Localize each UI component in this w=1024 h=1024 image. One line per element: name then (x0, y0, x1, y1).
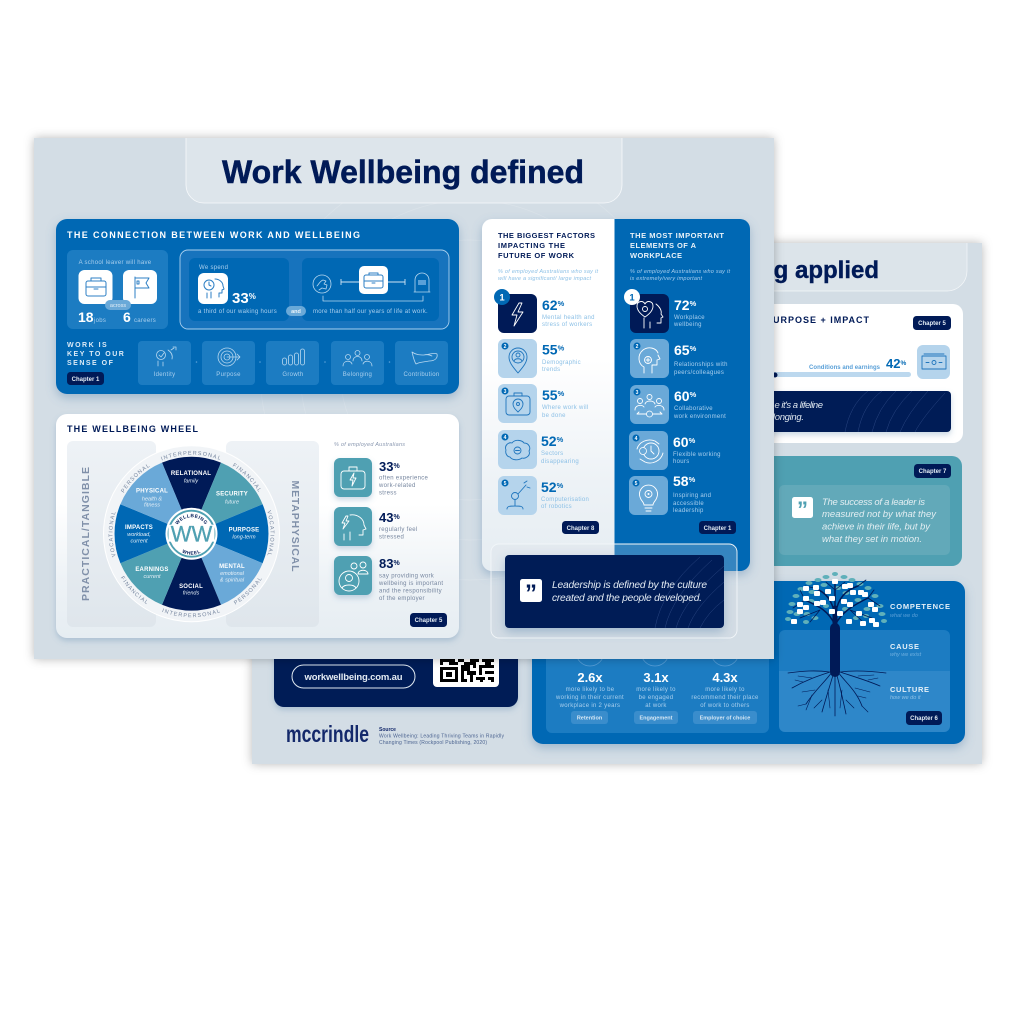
segment: social: friends (183, 590, 200, 596)
item 4: sectors disappearing: 4 (504, 435, 507, 441)
column: biggest factors (494, 231, 599, 534)
item 5: inspiring leadership (629, 473, 711, 515)
icon: quotation mark: ” (797, 497, 808, 522)
item 2: relationships (630, 339, 728, 378)
stat: 6 careers: 6 (123, 309, 131, 325)
panel: connection between work and wellbeing (56, 219, 459, 394)
stat: retention (555, 638, 624, 724)
stat: 33 percent: % (249, 292, 256, 301)
item 4: flexible hours: % (689, 436, 696, 445)
stat: engagement: be engaged (639, 695, 673, 701)
back page title: Work Wellbeing applied (609, 257, 879, 284)
stat: 6 careers (123, 309, 156, 325)
item 2: relationships: % (690, 344, 697, 353)
chart: wheel (103, 446, 280, 622)
item 1: workplace wellbeing: 72 (674, 297, 690, 313)
item 4: sectors disappearing: Sectors (541, 451, 563, 457)
card: time at work (180, 250, 449, 329)
card: we spend: a third of our waking hours (198, 309, 277, 315)
segment: security: SECURITY (216, 492, 248, 498)
segment: earnings (135, 567, 169, 580)
heading: THE BIGGEST FACTORS (498, 231, 595, 240)
heading (630, 231, 724, 260)
stat: retention: 2.6x (577, 670, 603, 685)
segment: relational (171, 471, 211, 484)
item 3: where work will be done: % (558, 389, 565, 398)
icon: flag (123, 270, 157, 304)
heading (498, 231, 595, 260)
chapter 8 tag (562, 521, 599, 534)
segment: social: SOCIAL (179, 584, 203, 590)
item 5: inspiring leadership: 5 (635, 481, 638, 487)
segment: mental: & spiritual (220, 578, 245, 584)
ring labels: PERSONAL (120, 464, 150, 493)
website button: workwellbeing.com.au (304, 672, 403, 683)
stat: engagement: 3.1x (643, 670, 669, 685)
item 3: collaborative environment: % (690, 390, 697, 399)
ring labels: FINANCIAL (120, 576, 147, 604)
icon: head with clock (198, 273, 228, 304)
stat: 33 percent: 33 (232, 290, 249, 307)
source note: Changing Times (Rockpool Publishing, 2020) (379, 740, 487, 746)
item 2: demographic trends: % (558, 344, 565, 352)
stat: 33 percent stress: stress (379, 490, 397, 496)
chapter 1 tag: Chapter 1 (72, 377, 100, 383)
item 4: flexible hours: Flexible working (673, 452, 721, 458)
heading: FUTURE OF WORK (498, 251, 575, 260)
chapter 6 tag: Chapter 6 (910, 716, 938, 722)
item 5: computerisation: of robotics (541, 504, 572, 510)
segment: earnings: EARNINGS (135, 567, 169, 573)
stat: conditions and earnings: Conditions and earnings (809, 365, 881, 371)
stat: 18 jobs: jobs (93, 318, 106, 324)
chapter 1 tag: Chapter 1 (704, 526, 732, 532)
back page title (520, 243, 967, 291)
segment: physical (136, 488, 168, 508)
item 3: collaborative environment: Collaborative (674, 406, 713, 412)
tile: growth (266, 341, 319, 385)
card: half our years (302, 258, 439, 321)
item 3: where work will be done (498, 384, 589, 423)
stat: employer of choice: Employer of choice (700, 716, 750, 722)
website button (292, 665, 415, 688)
stat: 6 careers: careers (134, 318, 156, 324)
stat: employer of choice: recommend their place (691, 695, 759, 701)
item 1: mental health: 62 (542, 297, 558, 313)
quote: lifeline: e it's a lifeline (774, 400, 823, 411)
quote text: The success of a leader is (822, 497, 925, 508)
item 2: demographic trends: 2 (504, 344, 507, 350)
item 2: demographic trends: Demographic (542, 360, 581, 366)
card: half our years: more than half our years of life at work. (313, 309, 428, 315)
item 2: demographic trends: trends (542, 367, 560, 373)
stats box (546, 600, 769, 733)
stat: 33 percent stress: 33 (379, 459, 393, 474)
segment: impacts: workload, (127, 532, 151, 538)
stat: 83 percent responsibility: wellbeing is important (378, 581, 443, 587)
ring labels (108, 450, 274, 618)
chapter 7 tag (914, 464, 951, 478)
panel: blue impact and tree (532, 572, 965, 744)
stat: 33 percent stress (334, 458, 429, 497)
quote text: what they set in motion. (822, 534, 922, 545)
item 3: collaborative environment: 60 (674, 388, 690, 404)
segment: mental: emotional (220, 571, 245, 577)
chapter 1 tag (67, 372, 104, 385)
item 2: relationships: 65 (674, 342, 690, 358)
heading: work is key: SENSE OF (67, 360, 114, 367)
card: we spend (189, 258, 289, 321)
item 4: flexible hours (629, 431, 721, 470)
segment: security (216, 492, 248, 506)
pill: and (286, 306, 306, 316)
item 5: inspiring leadership: % (689, 475, 696, 484)
label: culture: CULTURE (890, 685, 929, 694)
quote text: Leadership is defined by the culture (552, 580, 707, 591)
label: cause: why we exist (890, 652, 922, 658)
wheel centre logo: WELLBEING (174, 514, 208, 524)
stat: 43 percent stressed: % (393, 514, 400, 521)
tile: contribution (395, 341, 448, 385)
subheading: will have a significant/ large impact (498, 276, 591, 282)
quote text: created and the people developed. (552, 593, 702, 604)
segment: impacts: current (130, 538, 148, 544)
icon: quotation mark (520, 579, 542, 607)
item 5: computerisation: 52 (541, 479, 557, 495)
label: competence: what we do (890, 613, 918, 619)
item 1: workplace wellbeing: 1 (629, 292, 635, 304)
stat: 83 percent responsibility: say providing work (379, 574, 435, 580)
item 1: mental health: stress of workers (542, 322, 592, 328)
stat: conditions and earnings: % (900, 360, 906, 367)
ring labels: INTERPERSONAL (160, 450, 220, 460)
item 3: where work will be done: Where work will (542, 405, 589, 411)
logo: mccrindle: mccrindle (286, 721, 369, 747)
label: culture (890, 685, 929, 701)
ring labels: INTERPERSONAL (162, 608, 220, 618)
segment: mental (219, 564, 245, 584)
subheading (498, 269, 598, 282)
ring labels: FINANCIAL (232, 463, 261, 492)
tree bands (779, 630, 950, 732)
heading: WORKPLACE (630, 251, 682, 260)
wheel centre logo (166, 508, 218, 560)
stat: employer of choice: more likely to (705, 687, 745, 693)
stat: 83 percent responsibility: of the employer (379, 596, 425, 602)
label: culture: how we do it (890, 695, 921, 701)
item 3: collaborative environment (630, 385, 726, 424)
stat: retention: workplace in 2 years (559, 703, 620, 709)
tile: purpose (202, 341, 255, 385)
stat: 18 jobs (78, 309, 106, 325)
stat: 83 percent responsibility: and the responsibility (379, 588, 442, 594)
stat: employer of choice (691, 638, 759, 724)
item 5: computerisation: Computerisation (541, 497, 589, 503)
stat: 33 percent stress: often experience (379, 476, 429, 482)
stat: engagement: more likely to (636, 687, 676, 693)
chapter 8 tag: Chapter 8 (567, 526, 595, 532)
item 2: demographic trends: 55 (542, 342, 558, 358)
tree foliage (785, 572, 887, 624)
subheading: is extremely/very important (630, 276, 702, 282)
ring labels: VOCATIONAL (268, 510, 274, 556)
item 4: flexible hours: hours (673, 459, 690, 465)
segment: physical: PHYSICAL (136, 488, 168, 494)
illustration: tree (785, 572, 887, 716)
item 1: mental health (494, 289, 595, 333)
heading: THE MOST IMPORTANT (630, 231, 724, 240)
item 5: computerisation: % (557, 481, 564, 490)
quote text: measured not by what they (822, 509, 937, 520)
stat: retention: more likely to be (566, 687, 615, 693)
quote text (822, 497, 937, 545)
stat: employer of choice: of work to others (700, 703, 750, 709)
segment: social (179, 584, 203, 596)
stat: 43 percent stressed: stressed (379, 534, 404, 540)
stat: 83 percent responsibility (334, 556, 443, 602)
side box: practical/tangible: PRACTICAL/TANGIBLE (80, 467, 92, 601)
quote box (779, 485, 950, 555)
stat: 43 percent stressed: regularly feel (379, 527, 418, 533)
heading: ELEMENTS OF A (630, 241, 697, 250)
pill: and: and (291, 309, 301, 315)
wheel centre logo: WW (171, 522, 212, 547)
heading: work is key (67, 342, 125, 367)
segment: relational: family (184, 478, 199, 484)
side box: practical/tangible (67, 441, 156, 627)
item 1: workplace wellbeing (624, 289, 705, 333)
item 5: inspiring leadership: accessible (673, 501, 704, 507)
item 2: relationships: peers/colleagues (674, 370, 724, 376)
item 5: inspiring leadership: leadership (673, 508, 704, 514)
side box: metaphysical (226, 441, 319, 627)
icon: quotation mark: ” (525, 580, 537, 607)
stat: retention: Retention (577, 716, 603, 722)
subheading: % of employed Australians who say it (630, 269, 730, 275)
tree blossoms (791, 579, 879, 627)
ring labels: VOCATIONAL (108, 512, 116, 558)
subheading: % of employed Australians who say it (498, 269, 598, 275)
segment: physical: health & (142, 496, 162, 502)
caption: employed australians: % of employed Australians (334, 442, 405, 448)
item 1: workplace wellbeing: % (690, 299, 697, 308)
quote: leadership (491, 544, 737, 638)
chapter 5 tag: Chapter 5 (415, 618, 443, 624)
card: school leaver: A school leaver will have (79, 260, 152, 266)
segment: purpose (229, 528, 259, 540)
stat: engagement: Engagement (639, 716, 673, 722)
tile: identity: Identity (154, 372, 175, 378)
stat: 83 percent responsibility: % (393, 560, 400, 567)
heading: purpose and impact: PURPOSE + IMPACT (766, 315, 871, 325)
icon: banknote (917, 345, 950, 379)
chapter 5 tag: Chapter 5 (918, 321, 946, 327)
tile: purpose: Purpose (216, 372, 241, 378)
stat: 18 jobs: 18 (78, 309, 94, 325)
panel: purpose and impact (532, 304, 963, 443)
item 4: sectors disappearing: 52 (541, 433, 557, 449)
stat: engagement: at work (645, 703, 667, 709)
tree roots (788, 671, 886, 716)
stat: conditions and earnings: 42 (886, 356, 900, 371)
stat: retention: working in their current (555, 695, 624, 701)
source note: Source (379, 727, 396, 733)
ring labels: PERSONAL (234, 578, 262, 604)
QR code (433, 640, 499, 687)
quote text: achieve in their life, but by (822, 522, 931, 532)
chapter 7 tag: Chapter 7 (919, 469, 947, 475)
back page: Work Wellbeing applied (252, 243, 982, 764)
item 3: where work will be done: 55 (542, 387, 558, 403)
panel: teal leadership quote (540, 456, 962, 566)
segment: earnings: current (143, 574, 161, 580)
title box (186, 138, 622, 203)
heading: IMPACTING THE (498, 241, 565, 250)
segment: relational: RELATIONAL (171, 471, 211, 477)
item 4: sectors disappearing: disappearing (541, 459, 579, 465)
chapter 5 tag (410, 613, 447, 627)
stat: 83 percent responsibility: 83 (379, 556, 393, 571)
segment: mental: MENTAL (219, 564, 245, 570)
card: we spend: We spend (199, 265, 228, 271)
heading: THE WELLBEING WHEEL (67, 424, 200, 434)
source note: Work Wellbeing: Leading Thriving Teams in Rapidly (379, 734, 504, 740)
segment: impacts: IMPACTS (125, 525, 153, 531)
panel: website and QR (274, 640, 518, 707)
stat: 33 percent stress: % (393, 463, 400, 470)
icon: briefcase (78, 270, 112, 304)
tile: contribution: Contribution (404, 372, 439, 378)
panel: biggest factors and important elements (482, 219, 750, 571)
item 4: flexible hours: 60 (673, 434, 689, 450)
item 3: collaborative environment: 3 (636, 390, 639, 396)
segment: physical: fitness (144, 502, 160, 508)
tile: identity (138, 341, 191, 385)
chapter 5 tag (913, 316, 951, 330)
chapter 6 tag (906, 711, 942, 725)
tile: belonging (331, 341, 384, 385)
item 2: demographic trends (498, 339, 581, 378)
item 5: computerisation: 5 (504, 481, 507, 487)
label: cause (890, 642, 922, 658)
title: Work Wellbeing defined (222, 154, 584, 190)
stat: conditions and earnings (700, 356, 911, 378)
stat: 43 percent stressed (334, 507, 418, 546)
item 3: collaborative environment: work environment (673, 414, 726, 420)
panel: the wellbeing wheel (54, 414, 462, 644)
label: competence (890, 602, 950, 619)
source note (379, 727, 504, 746)
card: school leaver (67, 250, 168, 329)
item 4: sectors disappearing (498, 430, 579, 469)
item 4: sectors disappearing: % (557, 435, 564, 444)
item 2: relationships: 2 (636, 344, 639, 350)
stat: engagement (634, 638, 678, 724)
quote text (552, 580, 707, 604)
front page: Work Wellbeing defined (28, 132, 780, 664)
stat: employer of choice: 4.3x (712, 670, 738, 685)
segment: purpose: PURPOSE (229, 528, 259, 534)
item 4: flexible hours: 4 (635, 436, 638, 442)
item 1: mental health: Mental health and (542, 315, 595, 321)
quote: lifeline: belonging. (763, 412, 804, 423)
item 5: inspiring leadership: Inspiring and (673, 493, 711, 499)
subheading (630, 269, 730, 282)
item 3: where work will be done: be done (542, 413, 566, 419)
label: competence: COMPETENCE (890, 602, 950, 611)
item 5: computerisation (498, 476, 589, 515)
item 2: relationships: Relationships with (674, 362, 728, 368)
chapter 1 tag (699, 521, 736, 534)
item 1: workplace wellbeing: wellbeing (673, 322, 702, 328)
heading: THE CONNECTION BETWEEN WORK AND WELLBEING (67, 230, 362, 240)
segment: security: future (225, 500, 239, 506)
heading: work is key: KEY TO OUR (67, 351, 125, 358)
column: most important elements (624, 231, 736, 534)
icon: quotation mark (792, 497, 813, 522)
pill: across: across (110, 303, 126, 309)
tile: growth: Growth (282, 372, 304, 378)
tile: belonging: Belonging (343, 372, 372, 378)
quote: lifeline (560, 391, 951, 432)
tree trunk and branches (793, 580, 880, 672)
wheel centre logo: WHEEL (182, 549, 200, 555)
side box: metaphysical: METAPHYSICAL (289, 480, 301, 572)
segment: purpose: long-term (232, 534, 256, 540)
item 3: where work will be done: 3 (504, 389, 507, 395)
item 1: mental health: 1 (499, 292, 505, 304)
segment: impacts (125, 525, 153, 544)
stat: 43 percent stressed: 43 (379, 510, 393, 525)
label: cause: CAUSE (890, 642, 919, 651)
item 1: workplace wellbeing: Workplace (674, 315, 705, 321)
heading: work is key: WORK IS (67, 342, 108, 349)
item 1: mental health: % (558, 299, 565, 308)
timeline icons (313, 266, 430, 301)
stat: 33 percent stress: work-related (378, 483, 416, 489)
item 5: inspiring leadership: 58 (673, 473, 689, 489)
wheel segments (115, 457, 268, 611)
